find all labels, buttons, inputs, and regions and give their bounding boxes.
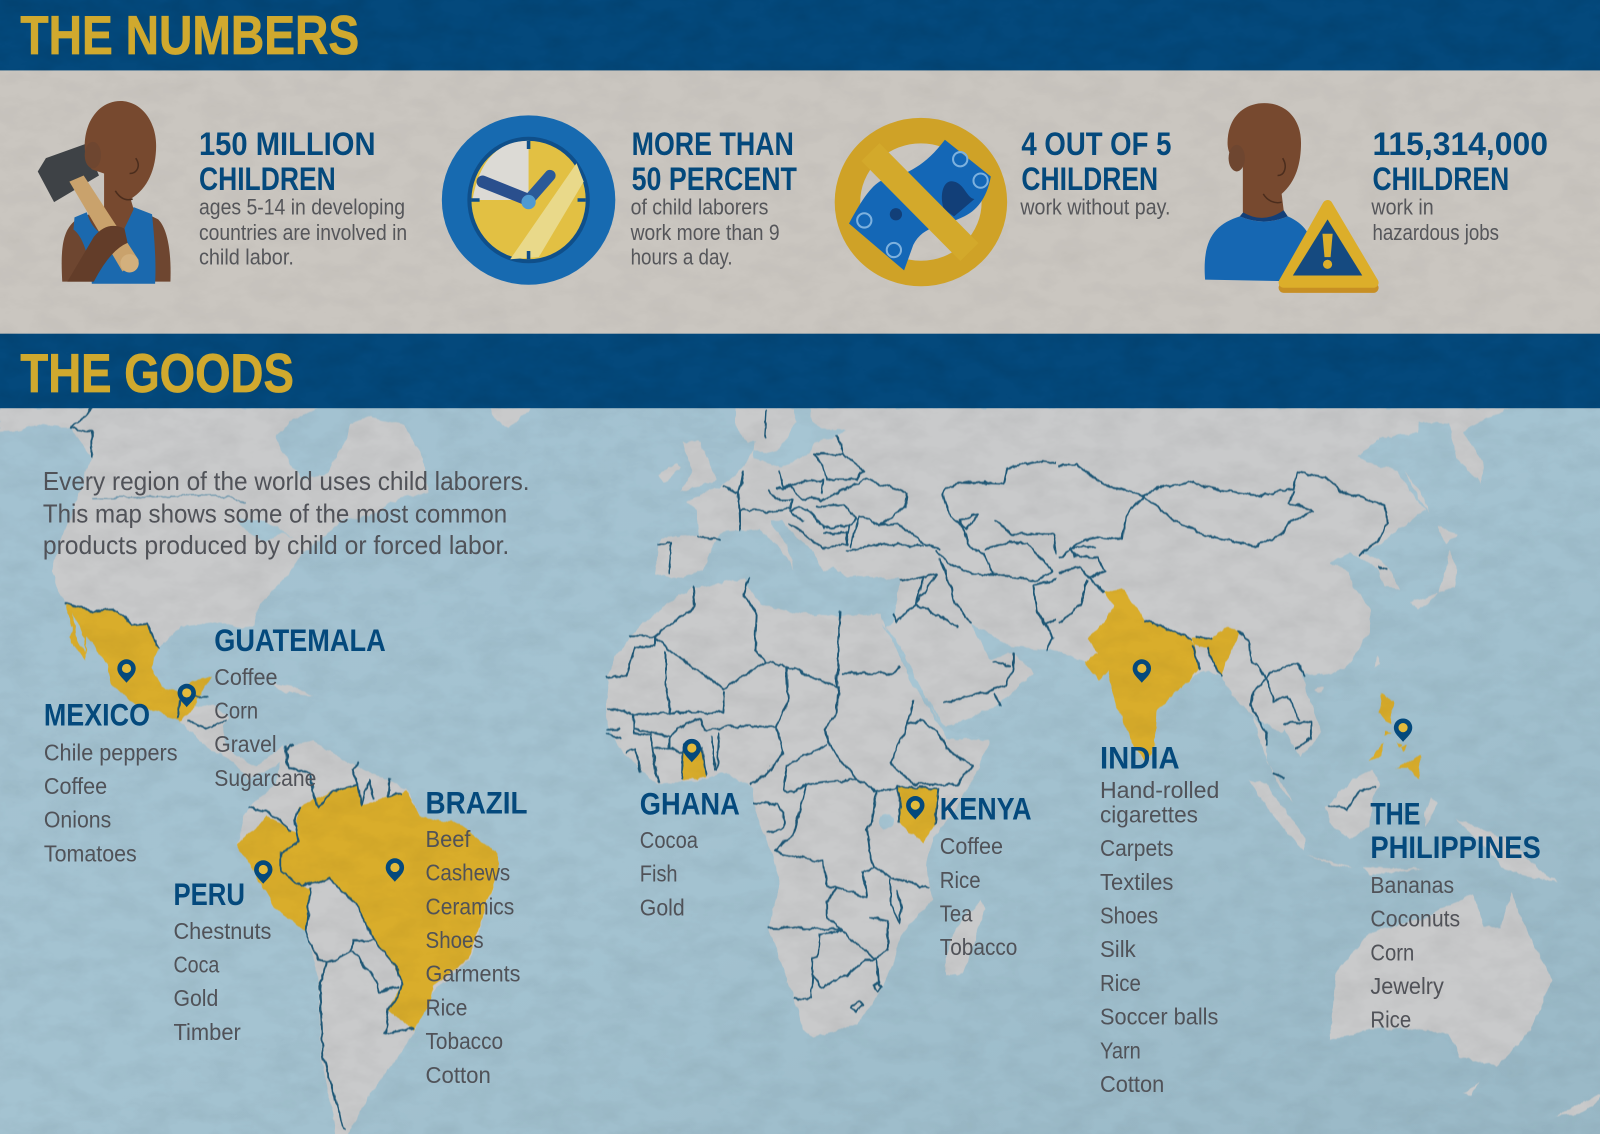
clock face: [471, 141, 586, 259]
Caribbean islands: [268, 682, 314, 695]
ear: [1229, 145, 1245, 171]
Eurasia west landmass: [655, 408, 1113, 729]
label: India: Carpets: [1100, 835, 1173, 861]
label: Guatemala: Sugarcane: [214, 765, 316, 791]
collar: [1240, 210, 1288, 221]
Mexico and Guatemala highlighted: [65, 604, 212, 720]
stat: more than 50 percent: MORE THAN: [632, 125, 794, 162]
stat: 115,314,000: [1371, 125, 1548, 245]
label: Brazil: Ceramics: [426, 893, 514, 919]
label: Guatemala: Gravel: [214, 731, 277, 757]
label: Peru: PERU: [173, 876, 245, 912]
Baltic Sea: [753, 408, 847, 468]
icon: pin Philippines: [1394, 718, 1412, 742]
label: The Philippines: Rice: [1370, 1007, 1411, 1033]
stat: more than 50 percent: 50 PERCENT: [632, 160, 797, 197]
banknote details: [942, 181, 974, 216]
label: Ghana: Cocoa: [640, 827, 699, 853]
map ocean: [0, 408, 1600, 1134]
Asia borders: [1060, 465, 1387, 809]
Philippines highlighted: [1368, 694, 1422, 779]
Kenya highlighted: [897, 786, 938, 843]
Taiwan and Hainan: [1315, 655, 1380, 694]
label: Brazil: [426, 784, 528, 1088]
label: Mexico: [44, 697, 178, 866]
Africa borders: [607, 579, 973, 999]
label: Brazil: Cotton: [426, 1062, 491, 1088]
stat: 4 out of 5: [1020, 125, 1171, 219]
Australia: [1330, 890, 1552, 1066]
label: Guatemala: Coffee: [214, 664, 278, 690]
stat: 4 out of 5: 4 OUT OF 5: [1021, 125, 1171, 162]
label: Kenya: Coffee: [940, 833, 1003, 859]
Great Lakes: [237, 517, 295, 542]
label: Ghana: Gold: [640, 894, 685, 920]
label: Brazil: Garments: [426, 961, 520, 987]
icon: pin Mexico: [117, 659, 136, 683]
intro text: products produced by child or forced labor.: [43, 532, 509, 560]
stat: 115,314,000: 115,314,000: [1372, 125, 1548, 162]
label: India: Textiles: [1100, 869, 1173, 895]
Greenland: [490, 408, 532, 428]
label: The Philippines: Jewelry: [1370, 973, 1444, 999]
stat: 150 million: [199, 125, 407, 269]
label: Peru: Gold: [173, 985, 218, 1011]
banknote: [849, 140, 991, 270]
arm and hand: [67, 226, 128, 282]
heading: the numbers: THE NUMBERS: [20, 4, 359, 66]
label: India: Soccer balls: [1100, 1004, 1218, 1030]
map: Americas: [0, 408, 532, 1134]
Northeast India highlighted: [1191, 627, 1241, 676]
Ireland: [658, 463, 680, 484]
label: Brazil: BRAZIL: [426, 784, 528, 820]
South America: [237, 740, 497, 1134]
warning triangle: [1284, 205, 1373, 283]
stat: 4 out of 5: CHILDREN: [1021, 160, 1158, 197]
label: Ghana: Fish: [640, 861, 678, 887]
neck and head: [85, 101, 156, 237]
prohibition ring: [847, 131, 994, 273]
hammer head: [38, 144, 99, 202]
face lines: [1263, 158, 1285, 203]
stat: more than 50 percent: work more than 9: [630, 220, 780, 245]
map: Asia and Oceania: [1057, 408, 1600, 1117]
stat: 115,314,000: CHILDREN: [1372, 160, 1509, 197]
Lesotho and Swaziland: [852, 983, 881, 1013]
heading: the goods: THE GOODS: [20, 342, 294, 404]
icon: pin Brazil: [386, 858, 404, 882]
label: Kenya: [940, 790, 1032, 960]
shirt: [1205, 216, 1316, 282]
label: The Philippines: Corn: [1370, 939, 1414, 965]
panel: the numbers background: [0, 70, 1600, 334]
prohibition slash: [870, 152, 969, 252]
label: Mexico: Chile peppers: [44, 739, 178, 765]
stat: 150 million: child labor.: [199, 244, 294, 269]
Gulf of California: [73, 613, 85, 652]
icon: pin Kenya: [906, 796, 924, 819]
label: The Philippines: THE: [1370, 796, 1420, 832]
icon: child with hammer: [38, 101, 171, 284]
label: The Philippines: Bananas: [1370, 872, 1454, 898]
label: India: [1100, 739, 1219, 1097]
India highlighted: [1084, 588, 1199, 763]
label: Peru: [173, 876, 271, 1045]
exclamation mark: [1322, 234, 1333, 257]
Lake Victoria: [879, 813, 894, 829]
label: Peru: Timber: [173, 1019, 241, 1045]
Red Sea and Gulf of Aden: [882, 623, 990, 740]
Indonesia and Malaysia islands: [1248, 770, 1439, 874]
neck and head: [1228, 103, 1301, 218]
label: India: Shoes: [1100, 903, 1158, 929]
stat: 150 million: CHILDREN: [199, 160, 336, 197]
New Guinea: [1456, 819, 1558, 883]
Ghana highlighted: [682, 743, 706, 781]
band: the goods header: [0, 334, 1600, 408]
label: Brazil: Rice: [426, 994, 467, 1020]
panel: the goods world map: [0, 408, 1600, 1134]
label: Brazil: Shoes: [426, 927, 484, 953]
label: Guatemala: [214, 622, 386, 791]
icon: pin Ghana: [683, 739, 701, 762]
clock ring: [442, 115, 615, 285]
label: Brazil: Beef: [426, 826, 471, 852]
stat: more than 50 percent: [630, 125, 797, 269]
Japan and Korea area islands: [1404, 470, 1458, 611]
label: Kenya: Tobacco: [940, 934, 1017, 960]
Madagascar: [945, 900, 985, 976]
Central America: [176, 706, 285, 779]
label: India: Cotton: [1100, 1071, 1164, 1097]
stat: 4 out of 5: work without pay.: [1020, 194, 1170, 219]
clock tick marks: [471, 141, 586, 259]
label: Peru: Chestnuts: [173, 918, 271, 944]
label: India: Hand-rolled: [1100, 777, 1219, 803]
icon: child with hazard sign: [1205, 103, 1373, 288]
warning triangle shadow: [1284, 208, 1373, 288]
Britain: [680, 442, 717, 493]
label: Ghana: [640, 785, 740, 920]
warning triangle inner: [1293, 219, 1362, 276]
label: The Philippines: [1370, 796, 1541, 1033]
icon: pin Guatemala: [178, 684, 196, 707]
intro text: This map shows some of the most common: [43, 501, 507, 529]
label: India: Silk: [1100, 936, 1136, 962]
intro text: [43, 468, 530, 560]
icon: no money: [847, 131, 994, 273]
face lines: [115, 158, 138, 200]
Europe and Asia borders: [658, 410, 1100, 706]
icon: pin India: [1133, 659, 1151, 683]
Africa: [605, 579, 990, 1038]
label: Brazil: Tobacco: [426, 1028, 503, 1054]
label: Mexico: MEXICO: [44, 697, 150, 733]
icon: pin Peru: [254, 860, 272, 884]
Asia landmass: [1057, 408, 1511, 803]
US Canada border: [92, 495, 245, 505]
stat: 115,314,000: hazardous jobs: [1372, 220, 1499, 245]
label: Mexico: Tomatoes: [44, 840, 137, 866]
map: Europe, Africa, Middle East: [605, 408, 1113, 1038]
label: India: INDIA: [1100, 739, 1180, 775]
hammer handle: [69, 176, 139, 271]
label: Ghana: GHANA: [640, 785, 740, 821]
band: the numbers header: [0, 0, 1600, 70]
label: India: Yarn: [1100, 1037, 1141, 1063]
label: Mexico: Coffee: [44, 773, 107, 799]
label: Guatemala: Corn: [214, 697, 258, 723]
label: Peru: Coca: [173, 952, 220, 978]
stat: more than 50 percent: of child laborers: [631, 194, 768, 219]
label: Kenya: Rice: [940, 867, 981, 893]
white elapsed sector: [472, 141, 529, 200]
Peru highlighted: [237, 816, 310, 932]
stat: 150 million: 150 MILLION: [199, 125, 376, 162]
Brazil highlighted: [281, 784, 497, 1031]
North America landmass: [0, 408, 429, 648]
stat: more than 50 percent: hours a day.: [631, 244, 733, 269]
ear: [85, 142, 101, 168]
stat: 150 million: ages 5-14 in developing: [199, 194, 405, 219]
label: The Philippines: Coconuts: [1370, 906, 1460, 932]
ocean watercolor texture: [0, 408, 1600, 1134]
label: Mexico: Onions: [44, 807, 111, 833]
tank top: [73, 207, 155, 284]
stat: 115,314,000: work in: [1371, 194, 1434, 219]
Tasmania and New Zealand: [1463, 1082, 1600, 1117]
label: India: cigarettes: [1100, 802, 1198, 828]
stat: 150 million: countries are involved in: [199, 220, 407, 245]
label: India: Rice: [1100, 970, 1141, 996]
body: [62, 209, 171, 282]
label: Kenya: KENYA: [940, 790, 1032, 826]
label: Brazil: Cashews: [426, 860, 510, 886]
clock hands: [483, 182, 529, 200]
label: The Philippines: PHILIPPINES: [1370, 829, 1541, 865]
label: Guatemala: GUATEMALA: [214, 622, 386, 658]
intro text: Every region of the world uses child laborers.: [43, 468, 530, 496]
icon: clock: [442, 115, 615, 285]
Americas borders: [65, 408, 413, 1130]
label: Kenya: Tea: [940, 901, 973, 927]
